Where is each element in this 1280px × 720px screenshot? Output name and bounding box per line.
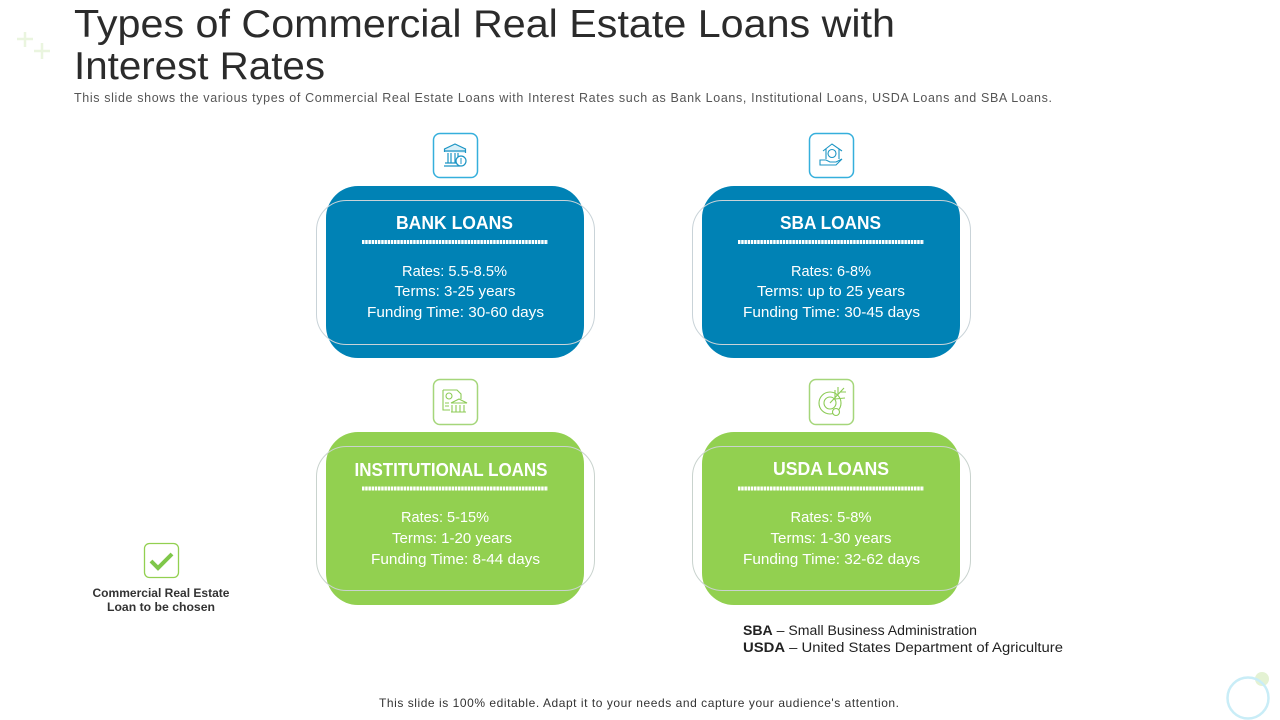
- icon: house on hand: [810, 134, 854, 178]
- decoration: corner circles: [1228, 672, 1269, 718]
- card outline: usda loans: [692, 446, 970, 590]
- dotted rule: sba loans: [738, 240, 924, 244]
- details: institutional loans: Funding Time: 8-44 days: [371, 551, 540, 568]
- heading: bank loans: BANK LOANS: [396, 212, 513, 233]
- legend label: [92, 586, 230, 614]
- icon: document and institution: [434, 380, 478, 424]
- details: institutional loans: Terms: 1-20 years: [392, 530, 512, 547]
- panel: sba loans: [692, 186, 970, 358]
- details: usda loans: [743, 509, 920, 568]
- footer note: This slide is 100% editable. Adapt it to your needs and capture your audience's attention.: [379, 696, 899, 710]
- details: institutional loans: Rates: 5-15%: [401, 509, 489, 526]
- heading: institutional loans: INSTITUTIONAL LOANS: [354, 459, 548, 480]
- title: Types of Commercial Real Estate Loans with: [74, 3, 895, 46]
- details: usda loans: Funding Time: 32-62 days: [743, 551, 920, 568]
- details: usda loans: Terms: 1-30 years: [770, 530, 892, 547]
- card outline: institutional loans: [316, 446, 594, 590]
- details: usda loans: Rates: 5-8%: [790, 509, 872, 526]
- heading: sba loans: SBA LOANS: [780, 212, 881, 233]
- legend label: Commercial Real Estate: [92, 586, 230, 600]
- legend label: Loan to be chosen: [107, 600, 215, 614]
- panel: institutional loans: [316, 432, 594, 605]
- abbreviations note: SBA – Small Business Administration: [743, 623, 977, 638]
- dotted rule: institutional loans: [362, 486, 548, 490]
- card background: usda loans: [702, 432, 960, 605]
- details: bank loans: Rates: 5.5-8.5%: [402, 263, 507, 280]
- panel: bank loans: [316, 186, 594, 358]
- heading: usda loans: USDA LOANS: [773, 458, 889, 479]
- details: sba loans: Terms: up to 25 years: [757, 283, 905, 300]
- abbreviations note: USDA – United States Department of Agriculture: [743, 640, 1063, 655]
- card outline: bank loans: [316, 200, 594, 344]
- details: sba loans: [743, 263, 920, 321]
- dotted rule: bank loans: [362, 240, 548, 244]
- title: Interest Rates: [74, 45, 325, 88]
- icon: bank with money bag: [434, 134, 478, 178]
- details: sba loans: Funding Time: 30-45 days: [743, 304, 920, 321]
- dotted rule: usda loans: [738, 486, 924, 490]
- card outline: sba loans: [692, 200, 970, 344]
- details: bank loans: [367, 263, 544, 321]
- panel: usda loans: [692, 432, 970, 605]
- details: institutional loans: [371, 509, 540, 568]
- details: sba loans: Rates: 6-8%: [791, 263, 871, 280]
- card background: institutional loans: [326, 432, 584, 605]
- subtitle: This slide shows the various types of Commercial Real Estate Loans with Interest Rates such as Bank Loans, Institutional Loans, USDA Loans and SBA Loans.: [74, 91, 1052, 105]
- title: [74, 3, 895, 88]
- details: bank loans: Terms: 3-25 years: [394, 283, 516, 300]
- details: bank loans: Funding Time: 30-60 days: [367, 304, 544, 321]
- abbreviations note: [743, 623, 1063, 655]
- legend: loan to be chosen: [92, 544, 230, 614]
- card background: sba loans: [702, 186, 960, 358]
- decoration: plus signs: [17, 32, 50, 59]
- icon: wheat and target: [810, 380, 854, 424]
- icon: check mark: [144, 544, 178, 578]
- card background: bank loans: [326, 186, 584, 358]
